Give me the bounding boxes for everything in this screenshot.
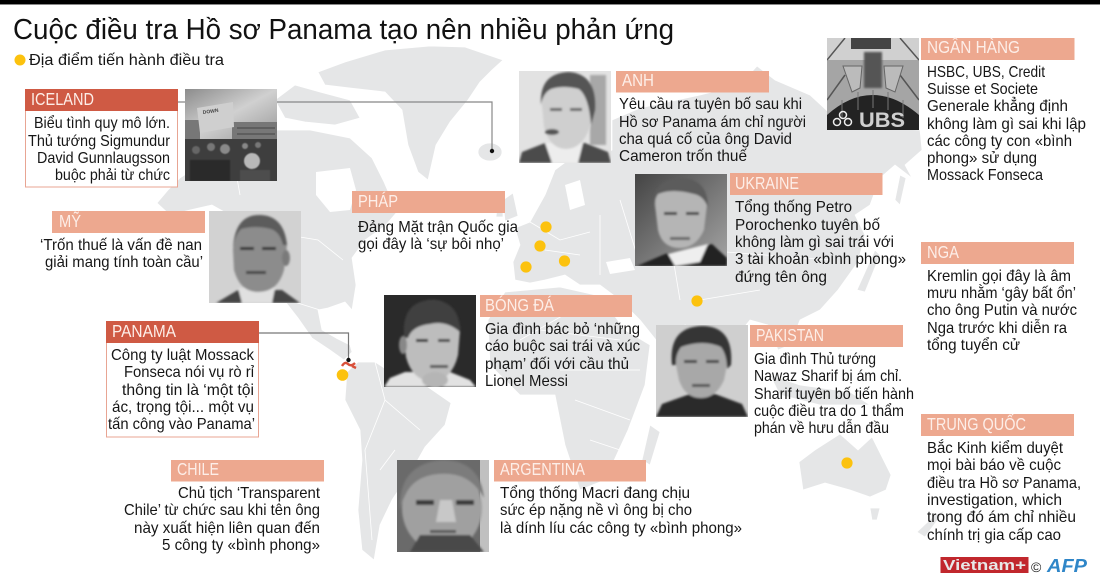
connector: Iceland: [178, 102, 492, 151]
panel: Banks: các công ty con «bình: [927, 133, 1072, 150]
panel: China: TRUNG QUỐC: [927, 413, 1026, 434]
panel: Iceland: Biểu tình quy mô lớn.: [34, 114, 170, 132]
panel: Chile: 5 công ty «bình phong»: [162, 537, 320, 554]
panel: Banks: phong» sử dụng: [927, 150, 1037, 167]
panel: USA: MỸ: [59, 210, 81, 231]
panel: Russia: tổng tuyển cử: [927, 336, 1020, 354]
panel: Banks: [921, 37, 1086, 184]
panel: Iceland: [25, 89, 178, 187]
panel: Banks: NGÂN HÀNG: [927, 37, 1020, 57]
panel: Football: phạm’ đối với cầu thủ: [485, 356, 629, 373]
panel: France: [352, 191, 518, 253]
panel: Chile: Chủ tịch ‘Transparent: [178, 485, 321, 502]
panel: Chile: Chile’ từ chức sau khi tên ông: [124, 502, 320, 519]
panel: Pakistan: [750, 325, 914, 437]
panel: Ukraine: Porochenko tuyên bố: [735, 217, 880, 234]
panel: Ukraine: 3 tài khoản «bình phong»: [735, 251, 906, 268]
panel: USA: giải mang tính toàn cầu’: [45, 254, 203, 271]
panel: Iceland: David Gunnlaugsson: [37, 150, 170, 167]
panel: China: trong đó ám chỉ nhiều: [927, 509, 1076, 526]
panel: Iceland: buộc phải từ chức: [55, 167, 170, 184]
logo: Vietnam+ and AFP: AFP: [1046, 556, 1088, 576]
panel: Panama: tấn công vào Panama’: [108, 416, 255, 433]
panel: France: PHÁP: [358, 191, 398, 211]
photo: Sharif: [656, 325, 748, 417]
panel: Chile: CHILE: [177, 459, 219, 479]
panel: USA: ‘Trốn thuế là vấn đề nan: [40, 237, 202, 254]
panel: China: [921, 413, 1081, 544]
panel: Football: Gia đình bác bỏ ‘những: [485, 321, 640, 338]
panel: Pakistan: Sharif tuyên bố tiến hành: [754, 386, 914, 403]
photo: Cameron: [519, 71, 611, 163]
photo: UBS building: UBS: [859, 109, 905, 132]
panel: Football: Lionel Messi: [485, 373, 568, 390]
logo: Vietnam+ and AFP: [940, 556, 1088, 576]
investigation location dots: [337, 221, 853, 469]
panel: Iceland: Thủ tướng Sigmundur: [28, 133, 171, 150]
logo: Vietnam+ and AFP: Vietnam+: [943, 558, 1026, 574]
panel: Pakistan: PAKISTAN: [756, 325, 824, 345]
panel: Panama: [106, 321, 259, 437]
panel: Argentina: [494, 459, 742, 537]
panel: United Kingdom: Hồ sơ Panama ám chỉ người: [619, 114, 806, 131]
panel: Panama: Công ty luật Mossack: [111, 347, 255, 364]
panel: Pakistan: Gia đình Thủ tướng: [754, 351, 876, 368]
panel: France: Đảng Mặt trận Quốc gia: [358, 219, 518, 236]
panel: Football: cáo buộc sai trái và xúc: [485, 338, 640, 355]
legend: Địa điểm tiến hành điều tra: [29, 51, 224, 69]
panel: Argentina: là dính líu các công ty «bình phong»: [500, 520, 742, 537]
panel: United Kingdom: cha quá cố của ông David: [619, 131, 792, 148]
title: Cuộc điều tra Hồ sơ Panama tạo nên nhiều phản ứng: [13, 14, 674, 46]
icon: Iceland dot: [490, 149, 494, 153]
panel: Russia: Nga trước khi diễn ra: [927, 318, 1067, 337]
panel: Panama: thông tin là ‘một tội: [122, 382, 254, 399]
logo: Vietnam+ and AFP: ©: [1031, 559, 1042, 575]
panel: Russia: mưu nhằm ‘gây bất ổn’: [927, 283, 1076, 302]
photo: Messi: [384, 295, 476, 388]
panel: Banks: Generale khẳng định: [927, 96, 1068, 115]
panel: United Kingdom: Cameron trốn thuế: [619, 148, 747, 165]
panel: Pakistan: cuộc điều tra do 1 thẩm: [754, 402, 904, 420]
panel: China: chính trị gia cấp cao: [927, 527, 1061, 544]
panel: Ukraine: đứng tên ông: [735, 269, 827, 286]
panel: Panama: PANAMA: [112, 321, 176, 341]
photo: Macri: [397, 460, 489, 552]
panel: Banks: Mossack Fonseca: [927, 167, 1043, 184]
panel: Russia: cho ông Putin và nước: [927, 302, 1077, 319]
panel: China: investigation, which: [927, 492, 1062, 509]
panel: United Kingdom: [616, 70, 806, 165]
panel: Ukraine: [730, 173, 906, 286]
connector: Panama: [259, 333, 348, 360]
panel: Chile: [124, 459, 324, 554]
icon: Panama dot: [346, 358, 351, 362]
panel: China: mọi bài báo về cuộc: [927, 457, 1061, 474]
panel: China: điều tra Hồ sơ Panama,: [927, 475, 1081, 492]
photo: Iceland protest: DOWN: [202, 108, 219, 116]
panel: Russia: Kremlin gọi đây là âm: [927, 268, 1071, 285]
panel: Panama: ác, trọng tội... một vụ: [112, 399, 254, 416]
panel: Pakistan: phán về hưu dẫn đầu: [754, 418, 889, 437]
panel: USA: [40, 210, 205, 271]
panel: Banks: Suisse et Societe: [927, 81, 1038, 98]
photo: Iceland protest: [185, 89, 277, 181]
panel: Iceland: ICELAND: [31, 89, 94, 109]
panel: Argentina: Tổng thống Macri đang chịu: [500, 484, 690, 502]
panel: Banks: không làm gì sai khi lập: [927, 116, 1086, 133]
photo: Poroshenko: [635, 174, 727, 266]
panel: Banks: HSBC, UBS, Credit: [927, 64, 1045, 81]
panel: Chile: này xuất hiện liên quan đến: [134, 520, 320, 537]
panel: Pakistan: Nawaz Sharif bị ám chỉ.: [754, 368, 902, 385]
panel: Ukraine: UKRAINE: [735, 173, 799, 193]
world map: [157, 46, 945, 560]
panel: Russia: NGA: [927, 242, 959, 262]
panel: Russia: [921, 242, 1077, 354]
panel: France: gọi đây là ‘sự bôi nhọ’: [358, 236, 504, 253]
panel: Panama: Fonseca nói vụ rò rỉ: [124, 364, 254, 381]
panel: United Kingdom: ANH: [622, 70, 654, 90]
panel: China: Bắc Kinh kiểm duyệt: [927, 438, 1064, 457]
icon: Panama red marker: [342, 363, 356, 368]
photo: Obama: [209, 211, 301, 303]
panel: Ukraine: Tổng thống Petro: [735, 198, 852, 216]
panel: Football: BÓNG ĐÁ: [485, 294, 554, 315]
photo: UBS building: [827, 38, 919, 132]
panel: Ukraine: không làm gì sai trái với: [735, 234, 894, 251]
map country borders: [232, 150, 830, 540]
panel: Argentina: ARGENTINA: [500, 459, 585, 479]
panel: Football: [480, 294, 640, 390]
panel: Argentina: sức ép nặng nề vì ông bị cho: [500, 502, 692, 519]
panel: United Kingdom: Yêu cầu ra tuyên bố sau khi: [619, 96, 802, 113]
